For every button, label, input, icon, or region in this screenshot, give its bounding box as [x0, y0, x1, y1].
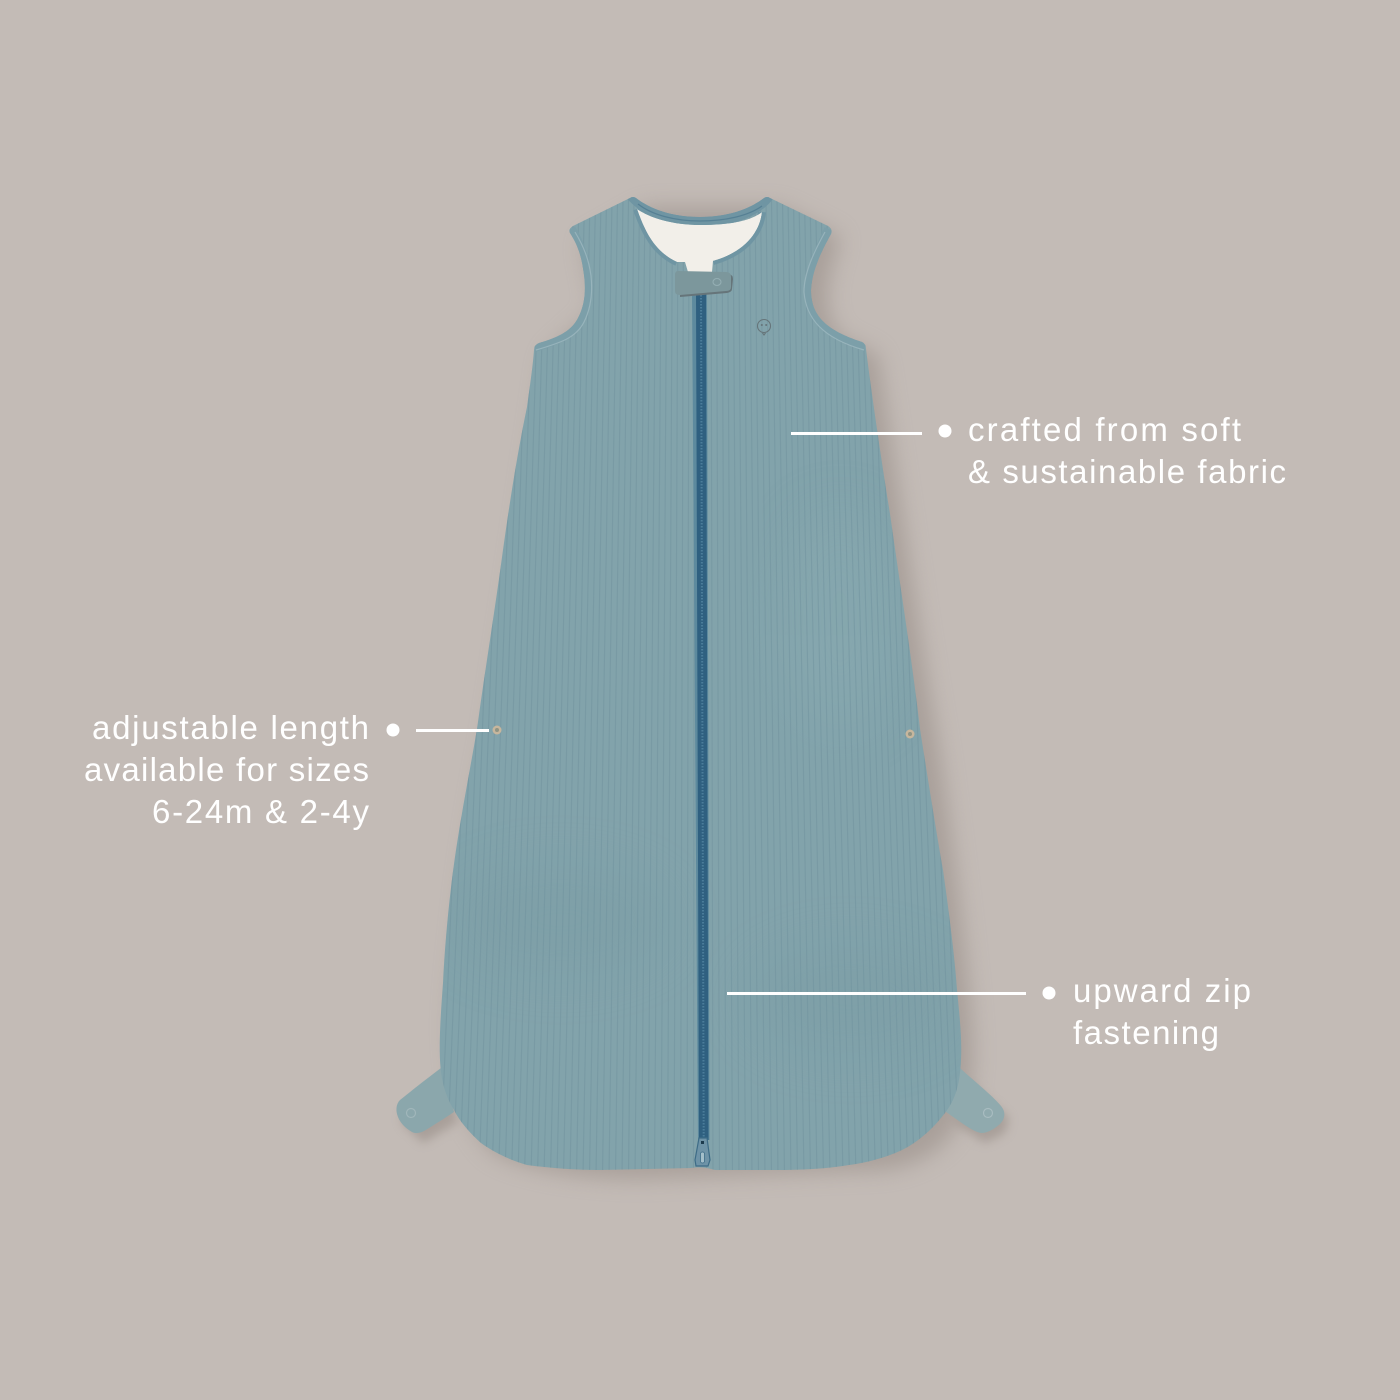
zipper — [692, 292, 710, 1166]
leader line — [727, 992, 1026, 995]
sleeping bag illustration — [396, 196, 1009, 1179]
callout text: available for sizes — [84, 751, 369, 788]
marker dot — [938, 424, 952, 438]
callout text: 6-24m & 2-4y — [152, 793, 370, 830]
slider pin — [701, 1141, 704, 1144]
leader line — [791, 432, 922, 435]
callout text: fastening — [1073, 1014, 1219, 1051]
callout: adjustable length — [84, 709, 489, 830]
leader line — [416, 729, 489, 732]
left foot tab — [396, 1068, 454, 1133]
callout text — [1073, 972, 1251, 1051]
neck zip cover tab — [675, 271, 733, 297]
cast shadow — [402, 207, 1009, 1179]
inner white lining — [634, 205, 765, 276]
collar binding — [630, 196, 770, 262]
left side snap — [492, 726, 502, 734]
right side snap — [906, 730, 914, 738]
marker dot — [386, 724, 400, 736]
ribbed texture — [440, 196, 960, 1175]
collar stitching — [638, 204, 762, 221]
callout text: upward zip — [1073, 972, 1251, 1009]
zipper teeth — [701, 292, 704, 1140]
callout: zip fastening — [727, 972, 1251, 1051]
callout: soft fabric — [791, 411, 1286, 490]
callout text: crafted from soft — [968, 411, 1241, 448]
garment body — [440, 197, 961, 1170]
callout text — [84, 709, 370, 830]
callout text: & sustainable fabric — [968, 453, 1286, 490]
callout text — [968, 411, 1286, 490]
left tab snap — [406, 1108, 416, 1118]
right tab snap — [984, 1108, 992, 1118]
slider pull — [700, 1152, 704, 1163]
zipper core — [696, 292, 708, 1140]
zipper slider — [695, 1138, 710, 1166]
armhole binding — [534, 230, 866, 345]
callout text: adjustable length — [92, 709, 369, 746]
marker dot — [1042, 986, 1056, 1000]
binding stitching — [536, 232, 864, 350]
zipper tape — [692, 292, 710, 1140]
tab snap — [713, 278, 721, 286]
logo mark — [758, 320, 770, 335]
right foot tab — [946, 1068, 1004, 1133]
tab shape — [675, 271, 731, 295]
tab shadow — [680, 274, 733, 297]
